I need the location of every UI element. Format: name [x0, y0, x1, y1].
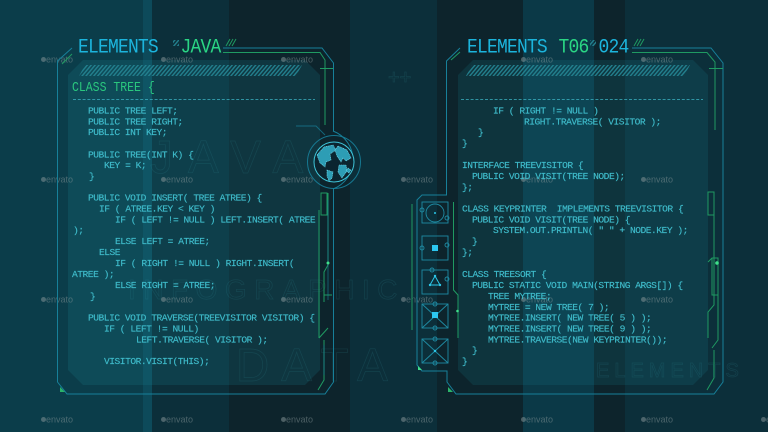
watermarks: envato	[166, 174, 193, 184]
icon: filled square widget	[420, 236, 449, 260]
icon: globe with rings	[296, 126, 360, 189]
icon: circle target widget	[420, 202, 449, 223]
text block: right code: }	[478, 127, 483, 138]
text block: right code: RIGHT.TRAVERSE( VISITOR );	[524, 116, 661, 127]
widget column	[420, 202, 449, 365]
text block: left code: PUBLIC TREE RIGHT;	[88, 116, 183, 127]
watermarks: envato	[166, 294, 193, 304]
watermarks: envato	[646, 54, 673, 64]
text block: right code: SYSTEM.OUT.PRINTLN( " " + NODE.KEY );	[493, 225, 688, 236]
text block: left code: ELSE LEFT = ATREE;	[115, 236, 210, 247]
text block: left code: VISITOR.VISIT(THIS);	[104, 356, 209, 367]
watermarks: envato	[166, 414, 193, 424]
text block: right code	[462, 106, 688, 367]
ghost background lettering: ++	[388, 67, 411, 89]
left HUD frame	[58, 48, 334, 394]
watermarks: envato	[526, 174, 553, 184]
text block: right code: MYTREE.TRAVERSE(NEW KEYPRINTER());	[488, 334, 667, 345]
heading: elements java: JAVA	[180, 35, 222, 59]
text block: right code: IF ( RIGHT != NULL )	[493, 106, 598, 116]
icon: cross dot widget	[422, 337, 448, 365]
watermarks: envato	[526, 54, 553, 64]
text block: right code: }	[462, 138, 467, 149]
watermarks: envato	[646, 414, 673, 424]
watermarks: envato	[406, 294, 433, 304]
hatched bar right	[466, 65, 690, 76]
text block: left code: PUBLIC VOID INSERT( TREE ATREE) {	[88, 192, 262, 204]
watermarks: envato	[406, 414, 433, 424]
watermarks: envato	[286, 294, 313, 304]
watermarks: envato	[526, 294, 553, 304]
heading: elements t06 024: ELEMENTS	[467, 35, 547, 59]
text block: right code: }	[472, 345, 477, 356]
text block: left code: PUBLIC VOID TRAVERSE(TREEVISITOR VISITOR) {	[88, 312, 314, 324]
text block: right code: PUBLIC VOID VISIT(TREE NODE) {	[472, 214, 630, 225]
code heading: class tree: CLASS TREE {	[72, 79, 155, 95]
text block: right code: INTERFACE TREEVISITOR {	[462, 160, 583, 171]
text block: left code: }	[89, 171, 94, 182]
watermarks: envato	[286, 54, 313, 64]
text block: right code: CLASS KEYPRINTER IMPLEMENTS TREEVISITOR {	[462, 204, 683, 214]
heading: elements t06 024	[467, 35, 644, 59]
text block: right code: PUBLIC STATIC VOID MAIN(STRING ARGS[]) {	[472, 280, 683, 291]
text block: right code: MYTREE.INSERT( NEW TREE( 5 ) );	[488, 312, 651, 324]
text block: right code: CLASS TREESORT {	[462, 269, 546, 280]
watermarks: envato	[526, 414, 553, 424]
divider left	[73, 98, 315, 100]
watermarks: envato	[166, 54, 193, 64]
text block: left code: IF ( LEFT != NULL ) LEFT.INSERT( ATREE	[115, 214, 316, 225]
heading: elements t06 024: 024	[598, 35, 629, 59]
ghost background lettering	[128, 67, 744, 391]
panel: right code panel background	[458, 60, 708, 385]
hatched bar left	[79, 65, 302, 76]
icon: triangle widget	[422, 268, 449, 294]
watermarks: envato	[406, 174, 433, 184]
text block: left code: IF ( ATREE.KEY < KEY )	[99, 204, 215, 214]
watermarks: envato	[286, 174, 313, 184]
heading: elements java	[78, 35, 236, 59]
watermarks: envato	[46, 54, 73, 64]
watermarks: envato	[46, 294, 73, 304]
ghost background lettering: JAVA	[150, 131, 318, 183]
text block: right code: };	[462, 182, 473, 193]
watermarks: envato	[646, 174, 673, 184]
watermarks: envato	[46, 414, 73, 424]
watermarks: envato	[646, 294, 673, 304]
heading: elements java: ELEMENTS	[78, 35, 158, 59]
text block: right code: }	[462, 356, 467, 367]
text block: right code: MYTREE.INSERT( NEW TREE( 9 ) );	[488, 324, 651, 334]
text block: left code: PUBLIC TREE(INT K) {	[88, 149, 193, 160]
right HUD frame	[412, 48, 723, 394]
text block: right code: MYTREE = NEW TREE( 7 );	[488, 302, 609, 313]
text block: left code: KEY = K;	[104, 160, 146, 171]
divider right	[461, 98, 703, 100]
text block: right code: TREE MYTREE;	[488, 291, 551, 302]
text block: left code: IF ( RIGHT != NULL ) RIGHT.INSERT(	[115, 258, 294, 269]
text block: left code: ELSE	[99, 247, 121, 258]
text block: left code: ELSE RIGHT = ATREE;	[115, 280, 215, 291]
text block: left code: LEFT.TRAVERSE( VISITOR );	[136, 334, 268, 345]
watermarks: envato	[286, 414, 313, 424]
text block: left code: PUBLIC INT KEY;	[88, 127, 167, 138]
text block: right code: PUBLIC VOID VISIT(TREE NODE);	[472, 171, 625, 182]
text block: left code: PUBLIC TREE LEFT;	[88, 106, 178, 116]
text block: left code	[72, 106, 316, 367]
ghost background lettering: INFOGRAPHIC	[128, 274, 405, 305]
text block: right code: };	[462, 247, 473, 258]
panel: left code panel background	[68, 60, 320, 385]
text block: right code: }	[472, 236, 477, 247]
ghost background lettering: ELEMENTS	[596, 360, 744, 382]
ghost background lettering: DATA	[236, 339, 400, 391]
text block: left code: }	[90, 291, 95, 302]
watermarks: envato	[46, 174, 73, 184]
text block: left code: );	[73, 225, 84, 236]
text block: left code: ATREE );	[72, 269, 114, 280]
text block: left code: IF ( LEFT != NULL)	[104, 324, 199, 334]
heading: elements t06 024: T06	[558, 35, 589, 59]
icon: cross square widget	[422, 302, 448, 330]
